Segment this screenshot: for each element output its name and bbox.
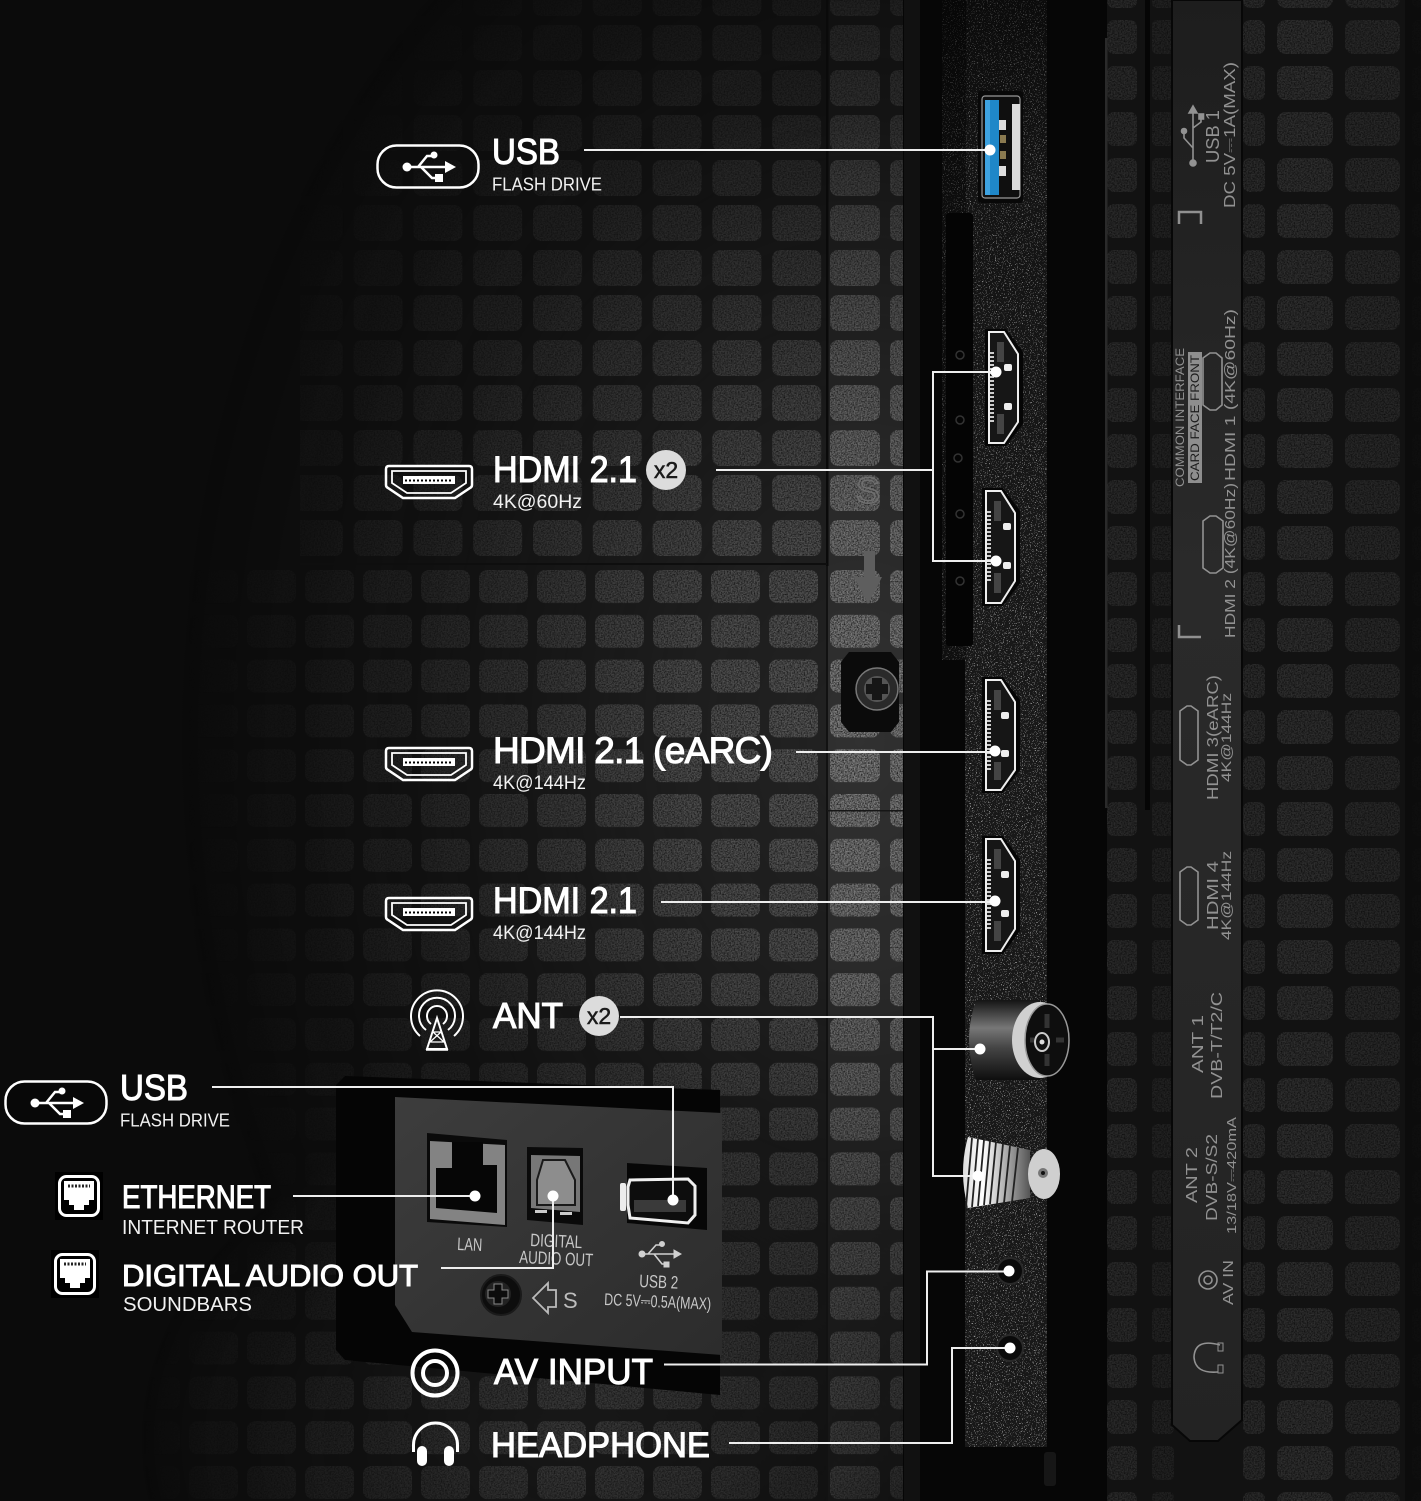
connector: antenna socket ANT 1 bbox=[969, 1000, 1069, 1080]
leader end dots bbox=[470, 144, 1016, 1354]
connector: HDMI port 4 bbox=[982, 836, 1020, 954]
recess bbox=[336, 1076, 720, 1395]
badge bbox=[646, 450, 686, 490]
callout: USB top bbox=[378, 131, 602, 194]
icon: HDMI bbox=[386, 898, 472, 930]
icon: optical audio bbox=[51, 1250, 99, 1298]
LAN port bbox=[427, 1133, 507, 1227]
connector: AV jack bbox=[997, 1258, 1023, 1284]
connector: HDMI port 2 bbox=[982, 488, 1020, 606]
label: HDMI 3 and 4: 4K@144Hz bbox=[1218, 851, 1234, 940]
rail: speckled connector strip bbox=[942, 0, 1056, 1486]
plate captions bbox=[457, 1230, 712, 1314]
label: antenna inputs: ANT 1 bbox=[1190, 1015, 1207, 1073]
heading: ETHERNET bbox=[122, 1179, 271, 1215]
label: HDMI 1 and 2: HDMI 2 (4K@60Hz) bbox=[1222, 483, 1239, 638]
heading: AV INPUT bbox=[494, 1351, 653, 1392]
heading: ANT bbox=[493, 995, 563, 1036]
icon: antenna bbox=[411, 990, 463, 1050]
heading: HDMI 2.1 bbox=[493, 449, 637, 490]
callout: HDMI 2.1 x2 bbox=[386, 449, 686, 513]
label: HDMI 3 and 4 bbox=[1180, 675, 1234, 940]
USB symbol on plate bbox=[639, 1242, 681, 1267]
icon: headphones bbox=[414, 1423, 458, 1466]
icon: HDMI bbox=[386, 748, 472, 780]
plate captions: AUDIO OUT bbox=[519, 1247, 594, 1270]
label: AV in and headphone: AV IN bbox=[1220, 1260, 1237, 1305]
label: antenna inputs: ANT 2 bbox=[1184, 1147, 1201, 1203]
leader lines bbox=[212, 150, 1010, 1443]
subheading: 4K@60Hz bbox=[493, 492, 582, 513]
label: HDMI 1 and 2: HDMI 1 (4K@60Hz) bbox=[1222, 309, 1239, 481]
icon: ethernet bbox=[55, 1172, 103, 1220]
label: USB 1 bbox=[1182, 62, 1239, 208]
mounting screw block bbox=[841, 652, 899, 732]
printed side label plate bbox=[1172, 0, 1242, 1441]
heading: DIGITAL AUDIO OUT bbox=[122, 1258, 418, 1293]
callout: HDMI 2.1 bbox=[386, 880, 637, 944]
heading: USB bbox=[120, 1067, 188, 1108]
callout: ANT x2 bbox=[411, 990, 619, 1050]
heading: HDMI 2.1 (eARC) bbox=[493, 730, 773, 771]
subheading: SOUNDBARS bbox=[123, 1294, 252, 1316]
label: common interface: CARD FACE FRONT bbox=[1188, 354, 1202, 481]
arrow and S mark bbox=[533, 1283, 578, 1313]
label: HDMI 3 and 4: HDMI 3(eARC) bbox=[1205, 675, 1222, 800]
card slot brackets bbox=[1179, 212, 1201, 637]
callout: HDMI 2.1 eARC bbox=[386, 730, 773, 794]
plate captions: DIGITAL bbox=[530, 1230, 583, 1252]
label: antenna inputs: DVB-S/S2 bbox=[1204, 1134, 1221, 1221]
callout: Ethernet bbox=[55, 1172, 304, 1239]
badge: x2 bbox=[654, 457, 678, 483]
embossed S mark and down arrow: S bbox=[856, 470, 880, 511]
heading: USB bbox=[492, 131, 560, 172]
label: HDMI 3 and 4: 4K@144Hz bbox=[1218, 693, 1234, 782]
plate captions: DC 5V⎓0.5A(MAX) bbox=[604, 1290, 712, 1314]
label: common interface: COMMON INTERFACE bbox=[1175, 348, 1187, 487]
connector: headphone jack bbox=[997, 1335, 1023, 1361]
label: AV in and headphone bbox=[1194, 1260, 1237, 1373]
connector: blue USB 3 port bbox=[978, 91, 1023, 203]
label: USB 1: DC 5V⎓1A(MAX) bbox=[1222, 62, 1239, 208]
label: common interface bbox=[1175, 348, 1202, 487]
screw bbox=[481, 1275, 521, 1315]
label: HDMI 1 and 2 bbox=[1203, 309, 1239, 638]
callout: Headphone bbox=[414, 1423, 710, 1466]
subheading: INTERNET ROUTER bbox=[122, 1216, 304, 1239]
label: antenna inputs: 13/18V⎓420mA bbox=[1224, 1117, 1239, 1234]
icon: USB pill bbox=[6, 1082, 106, 1124]
subheading: FLASH DRIVE bbox=[120, 1110, 230, 1130]
label: HDMI 3 and 4: HDMI 4 bbox=[1205, 861, 1222, 930]
heading: HEADPHONE bbox=[491, 1426, 710, 1465]
arrow and S mark: S bbox=[563, 1288, 578, 1313]
callout: AV input bbox=[412, 1350, 653, 1396]
optical port bbox=[527, 1147, 583, 1225]
subheading: 4K@144Hz bbox=[493, 773, 586, 794]
USB 2 port bbox=[620, 1163, 707, 1230]
callout: USB rear bbox=[6, 1067, 230, 1130]
connector: threaded satellite socket ANT 2 bbox=[963, 1137, 1060, 1208]
callout: Digital audio out bbox=[51, 1250, 418, 1316]
badge: x2 bbox=[587, 1003, 611, 1029]
connector: HDMI port 3 bbox=[982, 677, 1020, 793]
label: antenna inputs: DVB-T/T2/C bbox=[1209, 992, 1226, 1099]
heading: HDMI 2.1 bbox=[493, 880, 637, 921]
subheading: FLASH DRIVE bbox=[492, 174, 602, 194]
icon: AV ring bbox=[412, 1350, 458, 1396]
label: antenna inputs bbox=[1184, 992, 1239, 1234]
label: USB 1: USB 1 bbox=[1203, 110, 1223, 163]
plate captions: LAN bbox=[457, 1234, 483, 1255]
badge bbox=[579, 996, 619, 1036]
subheading: 4K@144Hz bbox=[493, 923, 586, 944]
connector: HDMI port 1 bbox=[985, 329, 1023, 446]
icon: HDMI bbox=[386, 466, 472, 498]
icon: USB pill bbox=[378, 146, 478, 188]
bottom-centre recessed connector panel bbox=[336, 1076, 722, 1395]
embossed S mark and down arrow bbox=[854, 470, 882, 604]
plate captions: USB 2 bbox=[639, 1271, 679, 1293]
